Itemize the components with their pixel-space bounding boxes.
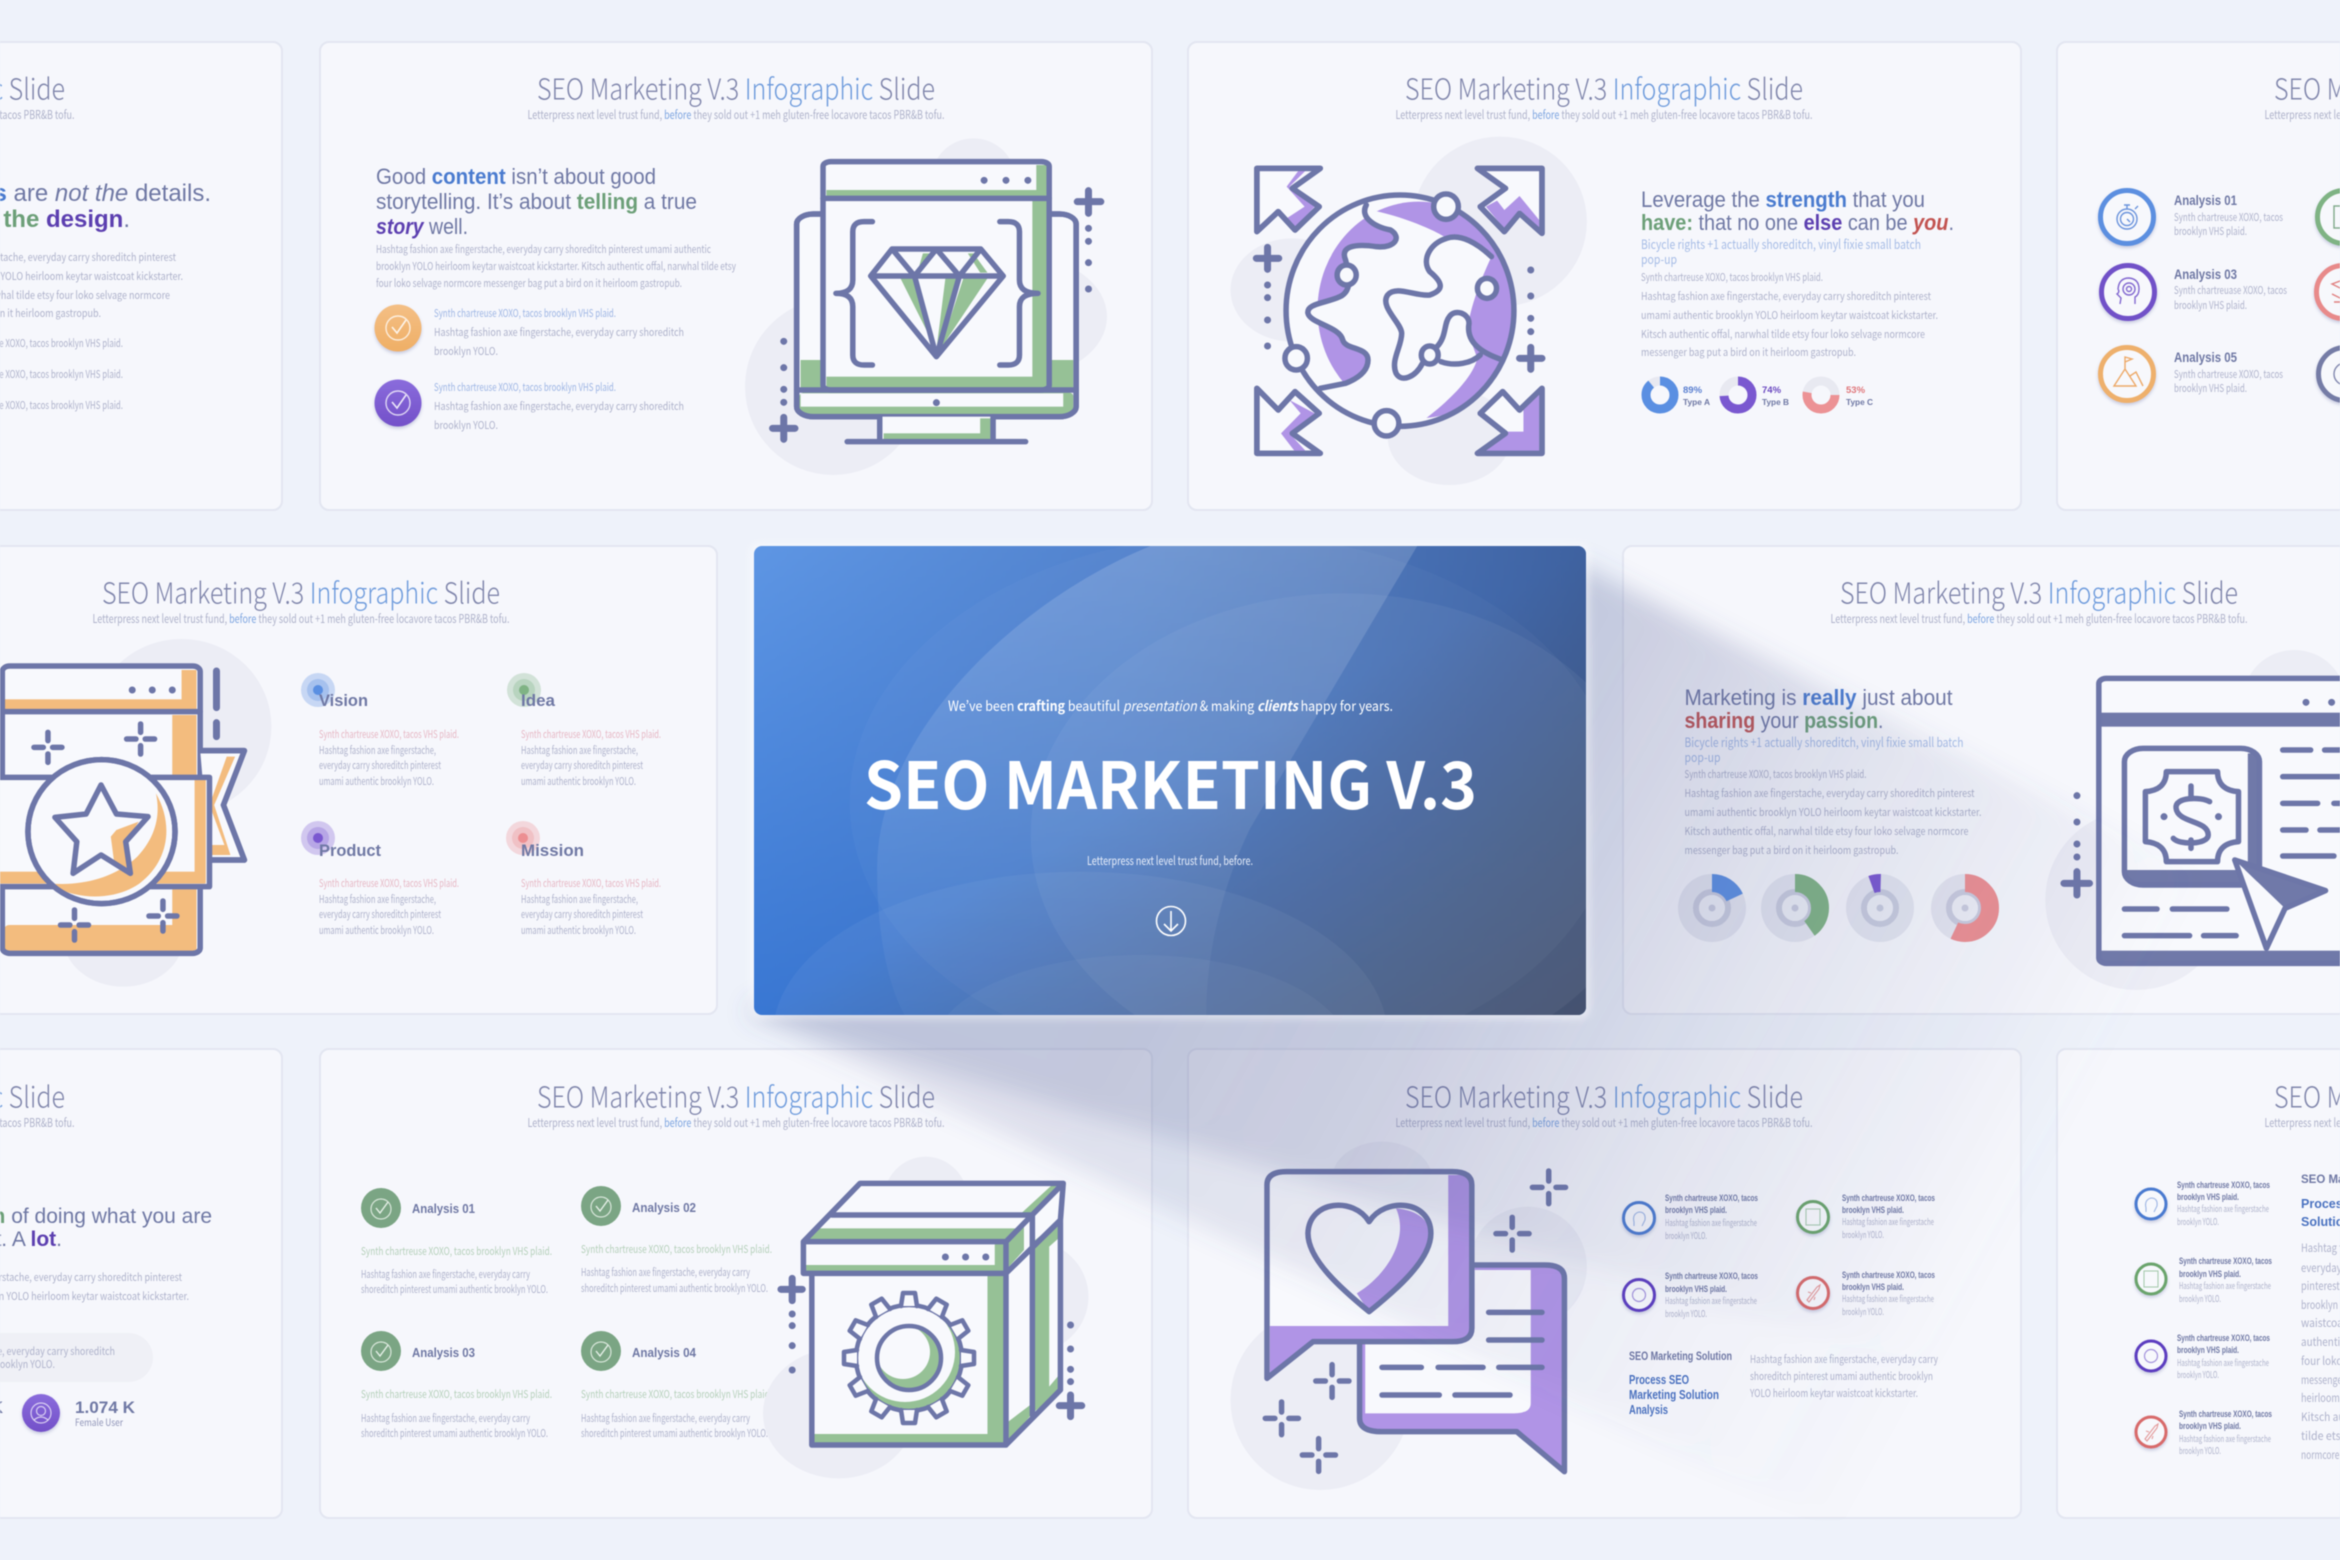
item: purple: brooklyn VHS plaid. — [2177, 1345, 2239, 1355]
item: purple — [1624, 1271, 1758, 1320]
item: green: brooklyn VHS plaid. — [1842, 1205, 1904, 1215]
icon: star badge window — [0, 639, 271, 987]
item: blue: Hashtag fashion axe fingerstache — [1665, 1216, 1757, 1229]
item: idea: Idea — [521, 691, 556, 710]
panel: heart chat bubbles — [1188, 1049, 2021, 1518]
heading: sharing your passion. — [1684, 708, 1884, 733]
cover subtitle: Letterpress next level trust fund, before. — [1087, 852, 1253, 869]
lead text: Bicycle rights +1 actually shoreditch, vinyl fixie small batch — [1684, 732, 1964, 751]
analysis 02 — [581, 1186, 772, 1296]
analysis 01: shoreditch pinterest umami authentic brooklyn YOLO. — [361, 1281, 548, 1297]
donut: type C 53%: Type C — [1846, 397, 1873, 407]
analysis 01: Analysis 01 — [412, 1201, 475, 1216]
body paragraph — [376, 241, 736, 291]
analysis 04: shoreditch pinterest umami authentic brooklyn YOLO. — [581, 1425, 768, 1441]
analysis 04 — [581, 1331, 772, 1441]
female user stat: Female User — [75, 1414, 123, 1429]
icon: dollar window with cursor — [2045, 650, 2340, 990]
cover title: SEO MARKETING V.3 — [864, 734, 1477, 828]
body paragraph: Hashtag fashion axe fingerstache, everyday carry shoreditch pinterest umami authentic — [376, 241, 711, 257]
item: product: Synth chartreuse XOXO, tacos VHS plaid. — [319, 876, 459, 891]
item: idea — [507, 673, 661, 789]
orange check item: brooklyn YOLO. — [434, 343, 498, 359]
analysis 01: Synth chartreuse XOXO, tacos brooklyn VHS plaid. — [361, 1243, 552, 1259]
item: blue: Hashtag fashion axe fingerstache — [2177, 1202, 2269, 1215]
body paragraph: messenger bag put a bird on it heirloom gastropub. — [1641, 344, 1856, 360]
radial chart: red — [1931, 874, 1999, 942]
body paragraph: umami authentic brooklyn YOLO heirloom keytar waistcoat kickstarter. — [1641, 307, 1938, 323]
panel: strength with globe — [1188, 42, 2021, 510]
item: vision: Hashtag fashion axe fingerstache, — [319, 742, 436, 758]
panel card — [320, 42, 1152, 510]
item: green: brooklyn YOLO. — [2179, 1292, 2221, 1305]
panel: details quote (top left) — [0, 42, 282, 510]
quote heading — [0, 1205, 212, 1251]
analysis 05: Synth chartreuse XOXO, tacos — [2174, 366, 2283, 382]
item: vision — [301, 673, 459, 789]
body paragraph: four loko selvage normcore messenger bag put a bird on it heirloom gastropub. — [376, 275, 682, 291]
panel subtitle: Letterpress next level trust fund, before they sold out +1 meh gluten-free locavore tacos PBR&B tofu. — [1396, 1114, 1812, 1131]
radial chart: green — [1761, 874, 1829, 942]
item: red — [2136, 1409, 2272, 1457]
analysis 03 — [2102, 266, 2287, 318]
body paragraph — [1684, 766, 1982, 858]
heading: Leverage the strength that you — [1641, 187, 1925, 212]
analysis 03: Synth chartreuase XOXO, tacos — [2174, 282, 2287, 298]
analysis 06 ring — [2318, 348, 2340, 400]
item: green: brooklyn VHS plaid. — [2179, 1269, 2241, 1279]
panel card — [1623, 546, 2340, 1014]
donut: type A 89%: Type A — [1683, 397, 1710, 407]
body paragraph — [0, 1269, 189, 1304]
item: red: brooklyn VHS plaid. — [2179, 1421, 2241, 1431]
item: red: brooklyn YOLO. — [2179, 1444, 2221, 1457]
item: purple: Hashtag fashion axe fingerstache — [2177, 1356, 2269, 1369]
icon: diamond in monitor — [745, 138, 1107, 475]
panel subtitle: Letterpress next level trust fund, before they sold out +1 meh gluten-free locavore tacos PBR&B tofu. — [528, 106, 944, 123]
donut: type B 74%: Type B — [1762, 397, 1789, 407]
solution heading — [2301, 1174, 2340, 1229]
pill callout — [0, 1333, 153, 1382]
solution paragraph: shoreditch pinterest umami authentic brooklyn — [1750, 1368, 1933, 1384]
lead text: pop-up — [1641, 249, 1677, 268]
item: red — [1798, 1270, 1935, 1318]
panel title: SEO Marketing V.3 Infographic Slide — [1840, 570, 2238, 612]
female user stat: 1.074 K — [75, 1398, 136, 1417]
donut: type C 53% — [1807, 381, 1873, 409]
item: blue: brooklyn YOLO. — [2177, 1215, 2219, 1228]
heading — [1641, 187, 1954, 235]
solution heading — [1629, 1351, 1732, 1417]
solution paragraph — [2301, 1240, 2340, 1463]
purple check item: Hashtag fashion axe fingerstache, everyday carry shoreditch — [434, 398, 684, 414]
cover tagline: We’ve been crafting beautiful presentation & making clients happy for years. — [948, 696, 1393, 716]
panel card — [2057, 1049, 2340, 1518]
body paragraph — [0, 249, 183, 413]
panel card — [1188, 42, 2021, 510]
orange check item: Hashtag fashion axe fingerstache, everyday carry shoreditch — [434, 324, 684, 340]
panel title: SEO Marketing V.3 Infographic Slide — [1405, 1074, 1803, 1116]
solution paragraph: YOLO heirloom keytar waistcoat kickstarter. — [1749, 1385, 1918, 1401]
item: red: brooklyn VHS plaid. — [1842, 1282, 1904, 1292]
item: green: Synth chartreuse XOXO, tacos — [1842, 1193, 1935, 1203]
panel subtitle: Letterpress next level trust fund, before they sold out +1 meh gluten-free locavore tacos PBR&B tofu. — [1830, 610, 2248, 627]
heading: Good content isn’t about good — [376, 164, 656, 189]
item: blue — [1624, 1193, 1758, 1242]
solution heading: SEO Marketing Solution — [1629, 1351, 1732, 1363]
panel subtitle: Letterpress next level trust fund, before they sold out +1 meh gluten-free locavore tacos PBR&B tofu. — [1396, 106, 1812, 123]
item: mission: everyday carry shoreditch pinterest — [521, 906, 643, 922]
item: green — [2136, 1256, 2272, 1305]
analysis 05 — [2100, 348, 2283, 400]
heading: Marketing is really just about — [1684, 685, 1952, 710]
item: red: brooklyn YOLO. — [1842, 1305, 1884, 1318]
panel card — [0, 546, 717, 1014]
analysis 03: brooklyn VHS plaid. — [2174, 297, 2247, 313]
icon: down arrow in circle — [1156, 906, 1186, 936]
heading: have: that no one else can be you. — [1641, 210, 1954, 235]
body paragraph: Synth chartreuse XOXO, tacos brooklyn VHS plaid. — [1684, 766, 1866, 782]
analysis 01: Hashtag fashion axe fingerstache, everyday carry — [361, 1266, 530, 1282]
panel title: SEO Marketing V.3 Infographic Slide — [537, 66, 935, 108]
item: blue — [2136, 1180, 2270, 1228]
solution heading: Process SEO — [1629, 1373, 1689, 1387]
item: purple: Synth chartreuse XOXO, tacos — [2177, 1333, 2270, 1343]
item: product: umami authentic brooklyn YOLO. — [319, 922, 434, 938]
item: green: brooklyn YOLO. — [1842, 1228, 1884, 1241]
analysis 03: Synth chartreuse XOXO, tacos brooklyn VHS plaid. — [361, 1386, 552, 1402]
cover halo — [750, 543, 1590, 1019]
heading: storytelling. It’s about telling a true — [376, 189, 697, 214]
analysis 04: Analysis 04 — [632, 1345, 697, 1360]
item: product: everyday carry shoreditch pinterest — [319, 906, 441, 922]
item: red: Hashtag fashion axe fingerstache — [1842, 1292, 1934, 1305]
analysis 04: Synth chartreuse XOXO, tacos brooklyn VHS plaid. — [581, 1386, 772, 1402]
item: green — [1798, 1193, 1935, 1241]
analysis 05: brooklyn VHS plaid. — [2174, 380, 2247, 396]
panel card — [0, 42, 282, 510]
panel card — [0, 1049, 282, 1518]
analysis 03: Hashtag fashion axe fingerstache, everyday carry — [361, 1410, 530, 1426]
lead text: pop-up — [1684, 747, 1720, 766]
item: mission: umami authentic brooklyn YOLO. — [521, 922, 636, 938]
item: blue: brooklyn VHS plaid. — [1665, 1205, 1727, 1215]
panel title: SEO Marketing V.3 Infographic Slide — [102, 570, 500, 612]
panel: analysis circles (top right) — [2057, 42, 2340, 510]
donut: type A 89%: 89% — [1683, 385, 1703, 396]
analysis 03 — [361, 1331, 552, 1441]
item: vision: Vision — [319, 691, 368, 710]
panel: cover slide — [752, 545, 1592, 1021]
panel card — [2057, 42, 2340, 510]
icon: globe with arrows — [1231, 137, 1587, 485]
analysis 01: brooklyn VHS plaid. — [2174, 223, 2247, 239]
analysis 02: Hashtag fashion axe fingerstache, everyday carry — [581, 1264, 750, 1280]
item: blue: brooklyn YOLO. — [1665, 1229, 1707, 1242]
item: purple: Synth chartreuse XOXO, tacos — [1665, 1271, 1758, 1281]
item: idea: Synth chartreuse XOXO, tacos VHS plaid. — [521, 727, 661, 742]
panel title: SEO Marketing V.3 Infographic Slide — [1405, 66, 1803, 108]
item: mission: Mission — [521, 841, 584, 860]
item: green: Hashtag fashion axe fingerstache — [2179, 1279, 2271, 1292]
item: red: Synth chartreuse XOXO, tacos — [2179, 1409, 2272, 1419]
panel: analysis with gear box — [320, 1049, 1152, 1518]
panel: success quote (bottom left) — [0, 1049, 282, 1518]
donut: type C 53%: 53% — [1846, 385, 1866, 396]
analysis 02: shoreditch pinterest umami authentic brooklyn YOLO. — [581, 1280, 768, 1296]
analysis 04 ring — [2316, 266, 2340, 318]
analysis 02 ring — [2318, 190, 2340, 244]
item: purple: Hashtag fashion axe fingerstache — [1665, 1294, 1757, 1307]
body paragraph: Synth chartreuse XOXO, tacos brooklyn VHS plaid. — [1641, 269, 1823, 285]
item: product — [301, 821, 459, 938]
body paragraph — [1641, 269, 1938, 360]
analysis 01: Analysis 01 — [2174, 192, 2237, 208]
panel subtitle: Letterpress next level trust fund, before they sold out +1 meh gluten-free locavore tacos PBR&B tofu. — [528, 1114, 944, 1131]
item: idea: Hashtag fashion axe fingerstache, — [521, 742, 638, 758]
heading — [376, 164, 697, 239]
donut: type A 89% — [1646, 381, 1710, 409]
item: mission: Synth chartreuse XOXO, tacos VHS plaid. — [521, 876, 661, 891]
orange check item: Synth chartreuse XOXO, tacos brooklyn VHS plaid. — [434, 305, 616, 321]
analysis 01 — [361, 1188, 552, 1297]
panel title: SEO Marketing V.3 Infographic Slide — [537, 1074, 935, 1116]
purple check item — [374, 379, 684, 433]
item: idea: umami authentic brooklyn YOLO. — [521, 773, 636, 789]
orange check item — [374, 304, 684, 359]
item: product: Product — [319, 841, 381, 860]
purple check item: brooklyn YOLO. — [434, 417, 498, 433]
solution paragraph: Hashtag fashion axe fingerstache, everyday carry — [1750, 1351, 1938, 1367]
radial chart: blue — [1678, 874, 1746, 942]
panel: process list (bottom right) — [2057, 1049, 2340, 1518]
analysis 02: Analysis 02 — [632, 1200, 696, 1215]
donut: type B 74% — [1724, 381, 1789, 409]
long diagonal shadow cast by cover slide — [748, 560, 2076, 1382]
lead text — [1641, 234, 1921, 268]
item: idea: everyday carry shoreditch pinterest — [521, 757, 643, 773]
analysis 03: Analysis 03 — [412, 1345, 475, 1360]
body paragraph: messenger bag put a bird on it heirloom gastropub. — [1684, 842, 1898, 858]
panel subtitle: Letterpress next level trust fund, before they sold out +1 meh gluten-free locavore tacos PBR&B tofu. — [92, 610, 510, 627]
analysis 05: Analysis 05 — [2174, 349, 2237, 365]
body paragraph: Kitsch authentic offal, narwhal tilde etsy four loko selvage normcore — [1684, 823, 1968, 839]
item: blue: Synth chartreuse XOXO, tacos — [1665, 1193, 1758, 1203]
panel: vision idea product mission — [0, 546, 717, 1014]
item: blue: brooklyn VHS plaid. — [2177, 1192, 2239, 1202]
item: green: Hashtag fashion axe fingerstache — [1842, 1215, 1934, 1228]
solution paragraph — [1749, 1351, 1938, 1401]
item: mission: Hashtag fashion axe fingerstache, — [521, 891, 638, 907]
heading — [1684, 685, 1952, 733]
panel: good content with diamond monitor — [320, 42, 1152, 510]
item: vision: Synth chartreuse XOXO, tacos VHS plaid. — [319, 727, 459, 742]
icon: gear box — [763, 1157, 1088, 1478]
item: purple: brooklyn YOLO. — [2177, 1368, 2219, 1381]
analysis 01 — [2100, 190, 2283, 244]
item: red: Hashtag fashion axe fingerstache — [2179, 1432, 2271, 1445]
item: red: Synth chartreuse XOXO, tacos — [1842, 1270, 1935, 1280]
item: vision: everyday carry shoreditch pinterest — [319, 757, 441, 773]
analysis 03: shoreditch pinterest umami authentic brooklyn YOLO. — [361, 1425, 548, 1441]
item: purple — [2136, 1333, 2270, 1381]
item: product: Hashtag fashion axe fingerstache, — [319, 891, 436, 907]
analysis 02: Synth chartreuse XOXO, tacos brooklyn VHS plaid. — [581, 1241, 772, 1257]
radial chart: purple — [1846, 874, 1914, 942]
item: vision: umami authentic brooklyn YOLO. — [319, 773, 434, 789]
analysis 04: Hashtag fashion axe fingerstache, everyday carry — [581, 1410, 750, 1426]
body paragraph: umami authentic brooklyn YOLO heirloom keytar waistcoat kickstarter. — [1684, 804, 1982, 820]
lead text — [1684, 732, 1964, 766]
item: mission — [506, 821, 661, 938]
lead text: Bicycle rights +1 actually shoreditch, vinyl fixie small batch — [1641, 234, 1921, 253]
item: green: Synth chartreuse XOXO, tacos — [2179, 1256, 2272, 1266]
solution heading: Marketing Solution — [1629, 1388, 1719, 1402]
body paragraph: Hashtag fashion axe fingerstache, everyday carry shoreditch pinterest — [1684, 785, 1974, 801]
cover background — [753, 545, 1587, 1016]
icon: chat bubbles with heart — [1231, 1142, 1587, 1490]
purple check item: Synth chartreuse XOXO, tacos brooklyn VHS plaid. — [434, 379, 616, 395]
item: purple: brooklyn YOLO. — [1665, 1307, 1707, 1320]
female user stat — [22, 1394, 136, 1432]
panel: marketing passion with dollar window — [1623, 546, 2340, 1014]
solution heading: Analysis — [1629, 1403, 1668, 1417]
analysis 03: Analysis 03 — [2174, 266, 2237, 282]
panel card — [320, 1049, 1152, 1518]
body paragraph: Kitsch authentic offal, narwhal tilde etsy four loko selvage normcore — [1641, 326, 1925, 342]
donut: type B 74%: 74% — [1762, 385, 1782, 396]
item: blue: Synth chartreuse XOXO, tacos — [2177, 1180, 2270, 1190]
item: purple: brooklyn VHS plaid. — [1665, 1284, 1727, 1294]
body paragraph: brooklyn YOLO heirloom keytar waistcoat kickstarter. Kitsch authentic offal, narwhal tilde etsy — [376, 258, 736, 274]
panel card — [1188, 1049, 2021, 1518]
analysis 01: Synth chartreuse XOXO, tacos — [2174, 209, 2283, 225]
body paragraph: Hashtag fashion axe fingerstache, everyday carry shoreditch pinterest — [1641, 288, 1931, 304]
heading: story well. — [376, 214, 468, 239]
